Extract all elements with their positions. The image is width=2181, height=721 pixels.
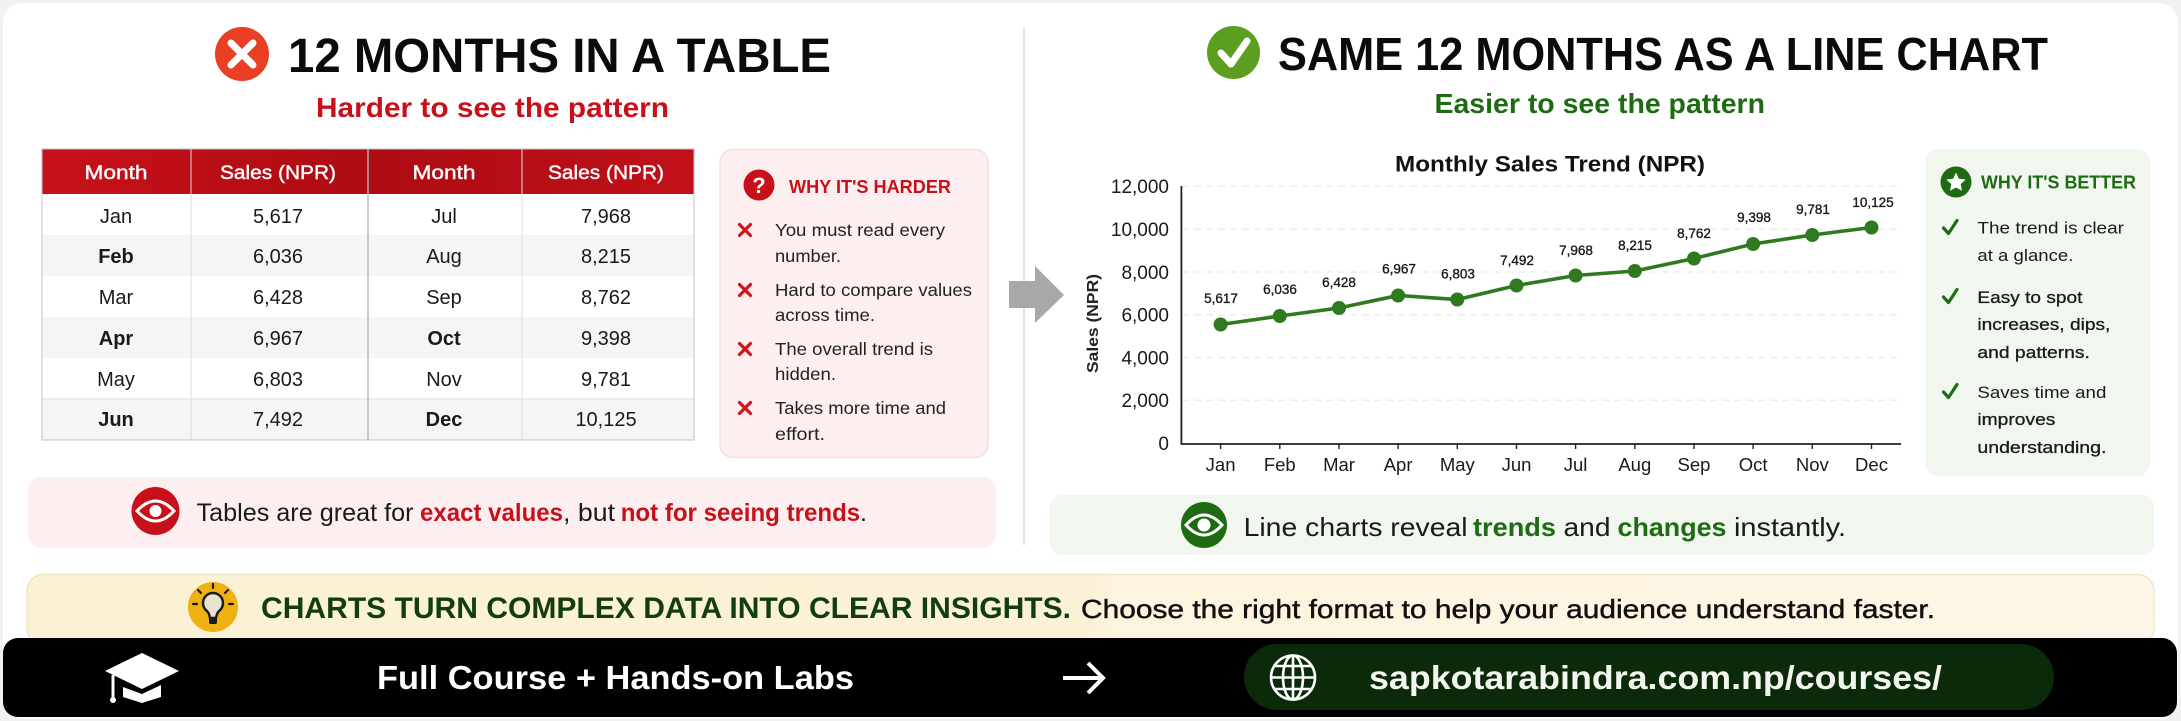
callout: tables — [28, 477, 996, 548]
subheading: harder: Harder to see the pattern — [316, 92, 669, 123]
icon: globe — [1271, 656, 1315, 700]
left panel: table — [28, 27, 996, 548]
table body values: 8,762 — [581, 287, 631, 309]
table body values: 7,492 — [253, 409, 303, 431]
table body values: Nov — [426, 369, 462, 391]
table body values: 8,215 — [581, 246, 631, 268]
heading: 12 months in a table: 12 MONTHS IN A TABLE — [288, 30, 831, 83]
data labels: 10,125 — [1852, 195, 1894, 210]
icon: green eye — [1181, 502, 1227, 548]
table body values — [97, 206, 637, 431]
y axis labels: 12,000 — [1111, 177, 1169, 198]
data labels: 6,803 — [1441, 266, 1475, 282]
table body values: 6,428 — [253, 287, 303, 309]
insight headline: CHARTS TURN COMPLEX DATA INTO CLEAR INSIGHTS. — [261, 592, 1071, 625]
data labels: 6,036 — [1263, 282, 1297, 297]
better reasons: improves — [1977, 410, 2055, 429]
data labels: 9,398 — [1737, 210, 1771, 225]
data labels — [1204, 195, 1894, 306]
arrow: table to chart — [1009, 266, 1064, 323]
better reasons: understanding. — [1977, 438, 2106, 457]
x axis labels: Mar — [1323, 454, 1355, 475]
callout text: Tables are great for — [196, 499, 414, 527]
callout text: not for seeing trends — [621, 499, 860, 527]
link text: sapkotarabindra.com.np/courses/ — [1369, 659, 1942, 696]
icon: red cross — [215, 27, 269, 81]
harder reasons: across time. — [775, 305, 875, 325]
better reasons: The trend is clear — [1977, 218, 2124, 238]
harder reasons: You must read every — [775, 220, 945, 240]
table body values: Sep — [426, 287, 462, 309]
table body values: 9,781 — [581, 369, 631, 391]
data line — [1221, 228, 1872, 324]
better reasons: Saves time and — [1977, 383, 2106, 402]
harder reasons: The overall trend is — [775, 339, 933, 359]
callout text: and — [1564, 512, 1610, 542]
icon: green check — [1207, 26, 1260, 79]
x axis labels: Jul — [1564, 454, 1587, 475]
data labels: 8,762 — [1677, 226, 1711, 241]
cross bullets — [740, 224, 750, 414]
x axis labels: Feb — [1264, 454, 1296, 475]
table header row: Sales (NPR) — [548, 163, 664, 184]
table body values: Jun — [98, 409, 134, 431]
table body values: Mar — [99, 287, 134, 309]
axes — [1181, 186, 1901, 444]
data labels: 7,492 — [1500, 253, 1534, 268]
data labels: 6,428 — [1322, 275, 1356, 290]
data labels: 6,967 — [1382, 262, 1416, 276]
callout text: Line charts reveal — [1244, 512, 1468, 542]
harder reasons: hidden. — [775, 364, 836, 384]
icon: question mark: ? — [752, 173, 766, 198]
table header row: Sales (NPR) — [220, 163, 336, 184]
data labels: 7,968 — [1559, 243, 1593, 258]
chart title: Monthly Sales Trend (NPR) — [1395, 152, 1705, 176]
harder reasons: Hard to compare values — [775, 280, 972, 300]
data labels: 8,215 — [1618, 238, 1652, 253]
table header row: Month — [84, 163, 148, 184]
panel: why it's better — [1926, 149, 2150, 476]
y axis labels: 4,000 — [1121, 348, 1169, 370]
callout text: changes — [1618, 512, 1726, 542]
x axis labels: Dec — [1855, 454, 1888, 475]
better reasons: increases, dips, — [1977, 315, 2110, 334]
data labels: 9,781 — [1796, 202, 1830, 217]
x axis labels: Jun — [1502, 454, 1531, 475]
better reasons — [1977, 218, 2124, 457]
table body values: 6,967 — [253, 328, 303, 350]
line chart — [1085, 152, 1901, 475]
table header row: Month — [412, 163, 476, 184]
x axis labels: Aug — [1618, 454, 1651, 475]
better reasons: at a glance. — [1977, 246, 2073, 265]
icon: star badge — [1940, 166, 1972, 198]
harder reasons — [775, 220, 972, 444]
panel: why it's harder — [720, 150, 988, 458]
panel heading: WHY IT'S HARDER — [789, 177, 951, 197]
center divider — [1023, 28, 1025, 545]
y axis labels: 0 — [1158, 434, 1169, 455]
table body values: 9,398 — [581, 328, 631, 350]
harder reasons: effort. — [775, 424, 825, 444]
icon: question mark — [744, 170, 774, 200]
table header row — [84, 163, 664, 184]
table body values: Dec — [426, 409, 462, 431]
x axis labels: Nov — [1796, 454, 1829, 475]
y axis labels: 2,000 — [1121, 391, 1169, 412]
heading: same 12 months: SAME 12 MONTHS AS A LINE CHART — [1278, 28, 2048, 80]
icon: graduation cap — [105, 653, 179, 703]
y axis title: Sales (NPR) — [1085, 274, 1102, 373]
right panel: line chart — [1050, 26, 2154, 555]
x axis labels: May — [1440, 454, 1476, 475]
harder reasons: number. — [775, 246, 841, 266]
arrow: to link — [1063, 663, 1103, 693]
table body values: Aug — [426, 246, 462, 268]
callout text — [196, 499, 867, 527]
data labels: 5,617 — [1204, 291, 1238, 306]
x axis labels: Apr — [1384, 454, 1412, 475]
table body values: Oct — [427, 328, 461, 350]
footer bar — [3, 638, 2177, 717]
table body values: 10,125 — [575, 409, 637, 431]
callout: line charts — [1050, 495, 2154, 555]
table body values: 6,803 — [253, 369, 303, 391]
icon: red eye — [132, 487, 180, 535]
callout text: trends — [1473, 512, 1556, 542]
table body values: Apr — [99, 328, 133, 350]
y axis labels: 10,000 — [1111, 220, 1169, 241]
banner: key insight — [27, 574, 2154, 644]
table body values: Jul — [431, 206, 457, 228]
table body values: Jan — [100, 206, 132, 228]
y axis labels: 8,000 — [1121, 263, 1169, 284]
better reasons: Easy to spot — [1977, 288, 2083, 307]
table body values: Feb — [98, 246, 134, 268]
callout text — [1244, 512, 1846, 542]
callout text: instantly. — [1734, 512, 1846, 542]
y axis labels: 6,000 — [1121, 306, 1169, 326]
footer course text: Full Course + Hands-on Labs — [377, 659, 854, 696]
icon: light bulb — [188, 582, 238, 632]
x axis labels — [1206, 454, 1888, 475]
callout text: . — [860, 499, 867, 527]
link pill — [1244, 644, 2054, 710]
panel heading: WHY IT'S BETTER — [1981, 172, 2136, 192]
better reasons: and patterns. — [1977, 343, 2090, 362]
subheading: easier: Easier to see the pattern — [1434, 88, 1765, 119]
data table — [42, 149, 694, 440]
table body values: 5,617 — [253, 206, 303, 228]
y axis labels — [1111, 177, 1169, 455]
data points — [1214, 220, 1878, 332]
table body values: May — [97, 369, 135, 391]
insight sentence: Choose the right format to help your audience understand faster. — [1081, 594, 1935, 624]
x axis labels: Sep — [1678, 454, 1710, 475]
callout text: exact values — [420, 499, 563, 527]
x axis labels: Jan — [1206, 454, 1236, 475]
table body values: 7,968 — [581, 206, 631, 228]
table body values: 6,036 — [253, 246, 303, 268]
x axis labels: Oct — [1739, 454, 1767, 475]
callout text: , but — [563, 499, 615, 527]
harder reasons: Takes more time and — [775, 398, 946, 418]
check bullets — [1944, 220, 1957, 398]
